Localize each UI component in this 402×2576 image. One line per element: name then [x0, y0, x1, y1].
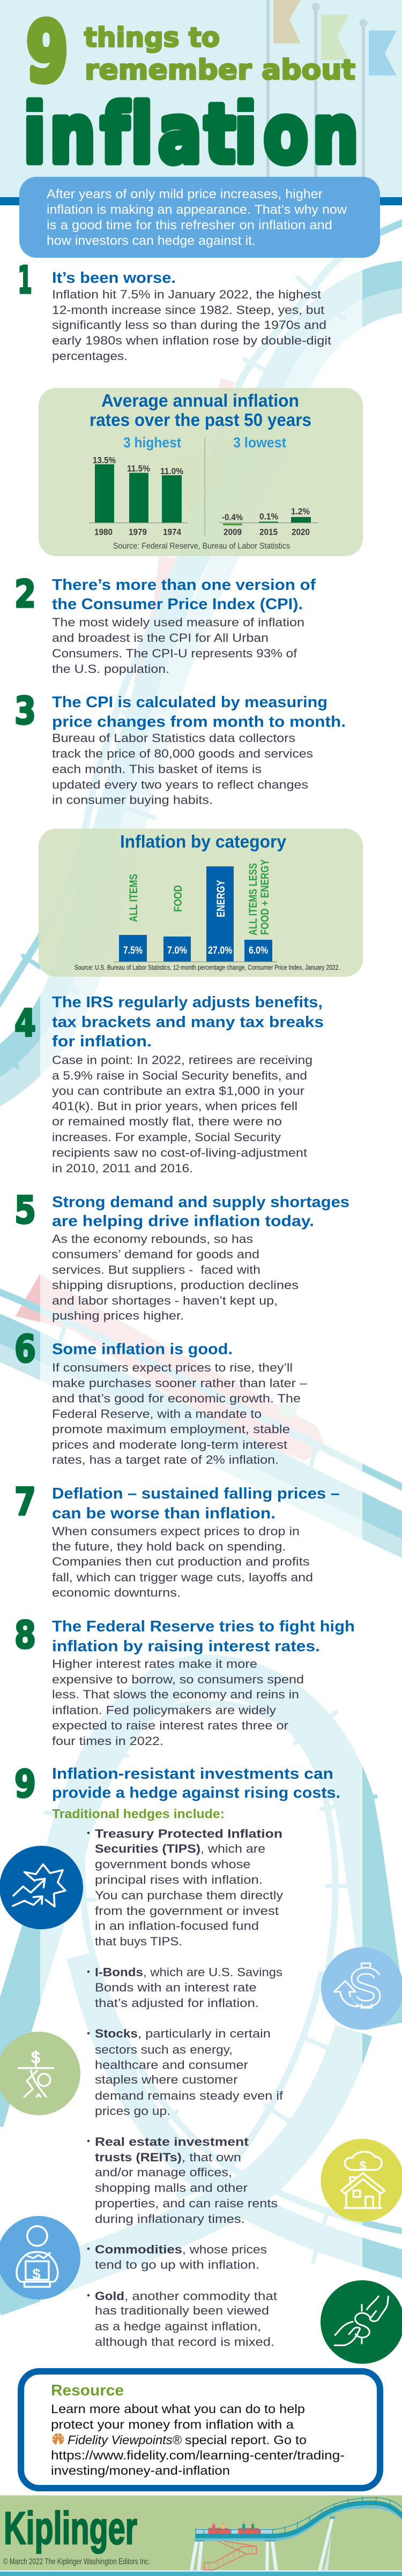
item 4: The IRS regularly adjusts benefits,: [52, 994, 323, 1011]
item 7: [14, 1480, 340, 1599]
item 4: in 2010, 2011 and 2016.: [52, 1162, 193, 1175]
panel: inflation by category chart: 6.0%: [249, 945, 268, 956]
list: Stocks: demand remains steady even if: [95, 2089, 284, 2102]
list: Stocks: Stocks: [95, 2027, 138, 2040]
panel: average annual inflation chart: [39, 388, 363, 556]
item 6: make purchases sooner rather than later –: [52, 1376, 308, 1390]
list: Gold: has traditionally been viewed: [95, 2304, 269, 2317]
list: REITs: , that own: [182, 2151, 241, 2164]
bar chart: 3 highest: 1974: [163, 527, 181, 537]
item 7: Companies then cut production and profits: [52, 1555, 310, 1568]
item 5: consumers’ demand for goods and: [52, 1247, 259, 1261]
list: TIPS: principal rises with inflation.: [95, 1873, 263, 1886]
panel: inflation by category chart: Source: U.S. Bureau of Labor Statistics, 12-month percentage change, Consumer Price Index, January 2022.: [75, 964, 340, 971]
list: Commodities: Commodities: [95, 2243, 182, 2256]
item 3: track the price of 80,000 goods and services: [52, 747, 313, 760]
item 5: are helping drive inflation today.: [52, 1213, 314, 1230]
item 4: or remained mostly flat, there were no: [52, 1114, 282, 1128]
panel: average annual inflation chart: Average annual inflation: [101, 391, 299, 410]
flags on poles: [266, 0, 397, 179]
panel: inflation by category chart: FOOD: [172, 885, 184, 912]
bar chart: 3 lowest: -0.4%: [222, 512, 243, 522]
list: TIPS: You can purchase them directly: [95, 1889, 283, 1902]
item 6: and that’s good for economic growth. The: [52, 1392, 301, 1405]
list: REITs: trusts (REITs): [95, 2151, 182, 2164]
bar chart: 3 lowest: 2015: [259, 527, 278, 537]
list: Stocks: [87, 2027, 284, 2118]
item 2: [14, 572, 316, 676]
item 5: As the economy rebounds, so has: [52, 1232, 253, 1246]
list: I-Bonds: [87, 1966, 282, 2010]
intro callout: [19, 177, 380, 258]
footer: [0, 2496, 402, 2576]
list: REITs: Real estate investment: [95, 2135, 249, 2148]
resource box: https://www.fidelity.com/learning-center/trading-: [51, 2448, 345, 2462]
item 8: inflation. Fed policymakers are widely: [52, 1704, 276, 1717]
item 3: Bureau of Labor Statistics data collectors: [52, 731, 295, 745]
resource box: investing/money-and-inflation: [51, 2463, 230, 2477]
item 8: expensive to borrow, so consumers spend: [52, 1673, 304, 1686]
list: TIPS: from the government or invest: [95, 1904, 279, 1918]
item 5: [14, 1188, 349, 1322]
list: Gold: , another commodity that: [124, 2289, 277, 2303]
intro callout: is a good time for this refresher on inflation and: [47, 218, 332, 233]
resource box: [21, 2371, 380, 2488]
list: Stocks: prices go up.: [95, 2105, 170, 2118]
resource box: special report. Go to: [185, 2433, 307, 2447]
item 1: early 1980s when inflation rose by double-digit: [52, 334, 331, 347]
list: REITs: and/or manage offices,: [95, 2166, 232, 2179]
list: Gold: as a hedge against inflation,: [95, 2319, 261, 2333]
item 5: shipping disruptions, production declines: [52, 1278, 299, 1292]
icon: Fidelity Viewpoints sunburst: [53, 2433, 64, 2445]
bar chart: 3 highest: 11.0%: [160, 466, 183, 476]
icon: person holding up dollar: [0, 2032, 80, 2115]
item 8: four times in 2022.: [52, 1734, 163, 1748]
icon: hands exchanging dollar: [321, 2280, 402, 2364]
resource box: Learn more about what you can do to help: [51, 2402, 305, 2416]
bar chart: 3 highest: [93, 455, 183, 537]
panel: inflation by category chart: ALL ITEMS: [127, 874, 140, 922]
item 6: [14, 1327, 308, 1466]
item 2: Consumers. The CPI-U represents 93% of: [52, 647, 297, 660]
item 2: the U.S. population.: [52, 662, 169, 676]
list: Stocks: , particularly in certain: [138, 2027, 271, 2040]
item 5: 5: [14, 1188, 36, 1232]
item 2: and broadest is the CPI for All Urban: [52, 631, 269, 645]
list: I-Bonds: that’s adjusted for inflation.: [95, 1996, 259, 2010]
bar chart: 3 lowest: 2009: [224, 527, 242, 537]
item 4: tax brackets and many tax breaks: [52, 1014, 324, 1031]
list: TIPS: in an inflation-focused fund: [95, 1919, 259, 1933]
item 8: The Federal Reserve tries to fight high: [52, 1618, 355, 1635]
item 1: significantly less so than during the 1970s and: [52, 318, 326, 332]
item 2: the Consumer Price Index (CPI).: [52, 596, 303, 613]
list: Commodities: [87, 2243, 267, 2272]
item 1: percentages.: [52, 349, 128, 363]
item 5: services. But suppliers - faced with: [52, 1263, 260, 1277]
list: TIPS: , which are: [200, 1842, 265, 1855]
item 3: updated every two years to reflect changes: [52, 778, 308, 791]
item 6: promote maximum employment, stable: [52, 1422, 290, 1436]
list: REITs: during inflationary times.: [95, 2212, 245, 2226]
icon: house with dollar cloud: [321, 2139, 402, 2222]
item 2: 2: [14, 572, 36, 616]
icon: burst with rising arrows: [0, 1846, 83, 1929]
item 1: [18, 258, 331, 363]
item 6: prices and moderate long-term interest: [52, 1438, 287, 1451]
list: REITs: properties, and can raise rents: [95, 2197, 278, 2210]
title: 9: [26, 5, 68, 100]
title: remember about: [85, 54, 355, 86]
bar chart: 3 lowest: 2020: [292, 527, 310, 537]
list: Commodities: tend to go up with inflation.: [95, 2258, 259, 2272]
item 6: If consumers expect prices to rise, they’ll: [52, 1361, 293, 1374]
illustration: roller coaster: [190, 2497, 402, 2570]
item 3: in consumer buying habits.: [52, 793, 213, 807]
icon: dollar with arrow: [321, 1947, 402, 2030]
title: inflation: [24, 88, 359, 181]
panel: inflation by category chart: ALL ITEMS LESS: [247, 863, 259, 935]
bar chart: 3 lowest: 0.1%: [259, 511, 278, 522]
item 1: It’s been worse.: [52, 269, 176, 287]
item 9: provide a hedge against rising costs.: [52, 1785, 340, 1802]
icon: person holding up dollar: $: [31, 2048, 41, 2067]
item 8: Higher interest rates make it more: [52, 1657, 257, 1671]
intro callout: inflation is making an appearance. That’s why now: [47, 203, 347, 217]
item 9: Inflation-resistant investments can: [52, 1765, 333, 1783]
item 8: 8: [14, 1613, 36, 1657]
icon: house with dollar cloud: $: [359, 2159, 367, 2173]
resource box: protect your money from inflation with a: [51, 2417, 294, 2431]
panel: average annual inflation chart: Source: Federal Reserve, Bureau of Labor Statistics: [113, 542, 290, 551]
item 6: Federal Reserve, with a mandate to: [52, 1407, 262, 1421]
item 3: each month. This basket of items is: [52, 762, 262, 776]
item 8: [14, 1613, 355, 1748]
item 3: The CPI is calculated by measuring: [52, 694, 327, 711]
item 6: Some inflation is good.: [52, 1341, 233, 1358]
item 7: the future, they hold back on spending.: [52, 1540, 286, 1553]
item 8: expected to raise interest rates three or: [52, 1719, 288, 1732]
list: I-Bonds: , which are U.S. Savings: [143, 1966, 282, 1979]
header background: [0, 0, 402, 205]
panel: inflation by category chart: 27.0%: [208, 945, 233, 956]
panel: inflation by category chart: [39, 828, 363, 977]
item 7: can be worse than inflation.: [52, 1505, 276, 1522]
item 5: Strong demand and supply shortages: [52, 1194, 349, 1211]
item 3: 3: [14, 689, 36, 733]
item 4: you can contribute an extra $1,000 in your: [52, 1084, 304, 1097]
item 9: Traditional hedges include:: [52, 1807, 225, 1822]
resource box: Fidelity Viewpoints®: [68, 2433, 182, 2447]
item 5: and labor shortages - haven’t kept up,: [52, 1294, 278, 1307]
copyright: © March 2022 The Kiplinger Washington Editors Inc.: [3, 2557, 150, 2566]
list: TIPS: government bonds whose: [95, 1858, 251, 1871]
item 7: Deflation – sustained falling prices –: [52, 1485, 340, 1502]
list: I-Bonds: Bonds with an interest rate: [95, 1981, 256, 1994]
panel: inflation by category chart: 7.0%: [167, 945, 187, 956]
list: TIPS: [87, 1827, 283, 1948]
panel: average annual inflation chart: 3 lowest: [233, 435, 286, 451]
item 5: pushing prices higher.: [52, 1309, 184, 1322]
item 7: When consumers expect prices to drop in: [52, 1525, 300, 1538]
bar chart: 3 lowest: 1.2%: [291, 506, 310, 516]
bar chart: 3 highest: 1980: [94, 527, 113, 537]
list: I-Bonds: I-Bonds: [95, 1966, 143, 1979]
item 6: rates, has a target rate of 2% inflation.: [52, 1453, 279, 1466]
item 2: The most widely used measure of inflation: [52, 616, 304, 629]
list: Stocks: sectors such as energy,: [95, 2043, 233, 2056]
item 1: 12-month increase since 1982. Steep, yes, but: [52, 303, 324, 317]
item 4: increases. For example, Social Security: [52, 1130, 281, 1144]
list: REITs: shopping malls and other: [95, 2181, 248, 2195]
item 4: a 5.9% raise in Social Security benefits, and: [52, 1069, 307, 1082]
panel: inflation by category chart: 7.5%: [123, 945, 143, 956]
intro callout: After years of only mild price increases, higher: [47, 187, 323, 201]
icon: person with dollar: [0, 2216, 80, 2300]
item 3: [14, 689, 346, 807]
list: Stocks: healthcare and consumer: [95, 2058, 248, 2071]
list: Gold: although that record is mixed.: [95, 2335, 274, 2349]
list: TIPS: that buys TIPS.: [95, 1935, 182, 1948]
panel: average annual inflation chart: 3 highest: [123, 435, 181, 451]
list: Gold: Gold: [95, 2289, 124, 2303]
bar chart: 3 lowest: [222, 506, 311, 537]
resource box: Resource: [51, 2382, 124, 2399]
panel: average annual inflation chart: rates over the past 50 years: [90, 410, 311, 430]
list: TIPS: Securities (TIPS): [95, 1842, 200, 1855]
bar chart: 3 highest: 1979: [129, 527, 147, 537]
item 1: Inflation hit 7.5% in January 2022, the highest: [52, 288, 321, 301]
item 7: fall, which can trigger wage cuts, layoffs and: [52, 1571, 313, 1584]
logo: Kiplinger: Kiplinger: [4, 2503, 137, 2554]
panel: inflation by category chart: FOOD + ENERGY: [258, 859, 271, 935]
item 1: 1: [18, 258, 32, 302]
item 3: price changes from month to month.: [52, 714, 346, 731]
item 4: Case in point: In 2022, retirees are receiving: [52, 1053, 312, 1067]
title: [23, 5, 359, 181]
item 4: 401(k). But in prior years, when prices fell: [52, 1099, 297, 1113]
panel: inflation by category chart: ENERGY: [214, 880, 227, 917]
item 7: economic downturns.: [52, 1586, 181, 1599]
list: Stocks: staples where customer: [95, 2073, 238, 2086]
item 4: recipients saw no cost-of-living-adjustment: [52, 1146, 307, 1159]
item 4: [14, 994, 324, 1175]
item 7: 7: [14, 1480, 36, 1524]
panel: inflation by category chart: Inflation by category: [120, 832, 287, 851]
item 8: less. That slows the economy and reins in: [52, 1688, 299, 1701]
item 2: There’s more than one version of: [52, 576, 316, 594]
list: Commodities: , whose prices: [182, 2243, 267, 2256]
bar chart: 3 highest: 13.5%: [93, 455, 116, 465]
intro callout: how investors can hedge against it.: [47, 234, 256, 248]
title: things to: [84, 22, 220, 53]
item 4: for inflation.: [52, 1033, 152, 1050]
item 8: inflation by raising interest rates.: [52, 1638, 320, 1655]
item 9: [14, 1762, 340, 2349]
item 6: 6: [14, 1327, 36, 1371]
bar chart: 3 highest: 11.5%: [127, 463, 150, 474]
list: REITs: [87, 2135, 278, 2226]
icon: person with dollar: $: [32, 2266, 41, 2282]
list: TIPS: Treasury Protected Inflation: [95, 1827, 282, 1840]
item 9: 9: [14, 1762, 36, 1806]
list: Gold: [87, 2289, 277, 2349]
item 4: 4: [14, 1001, 36, 1045]
